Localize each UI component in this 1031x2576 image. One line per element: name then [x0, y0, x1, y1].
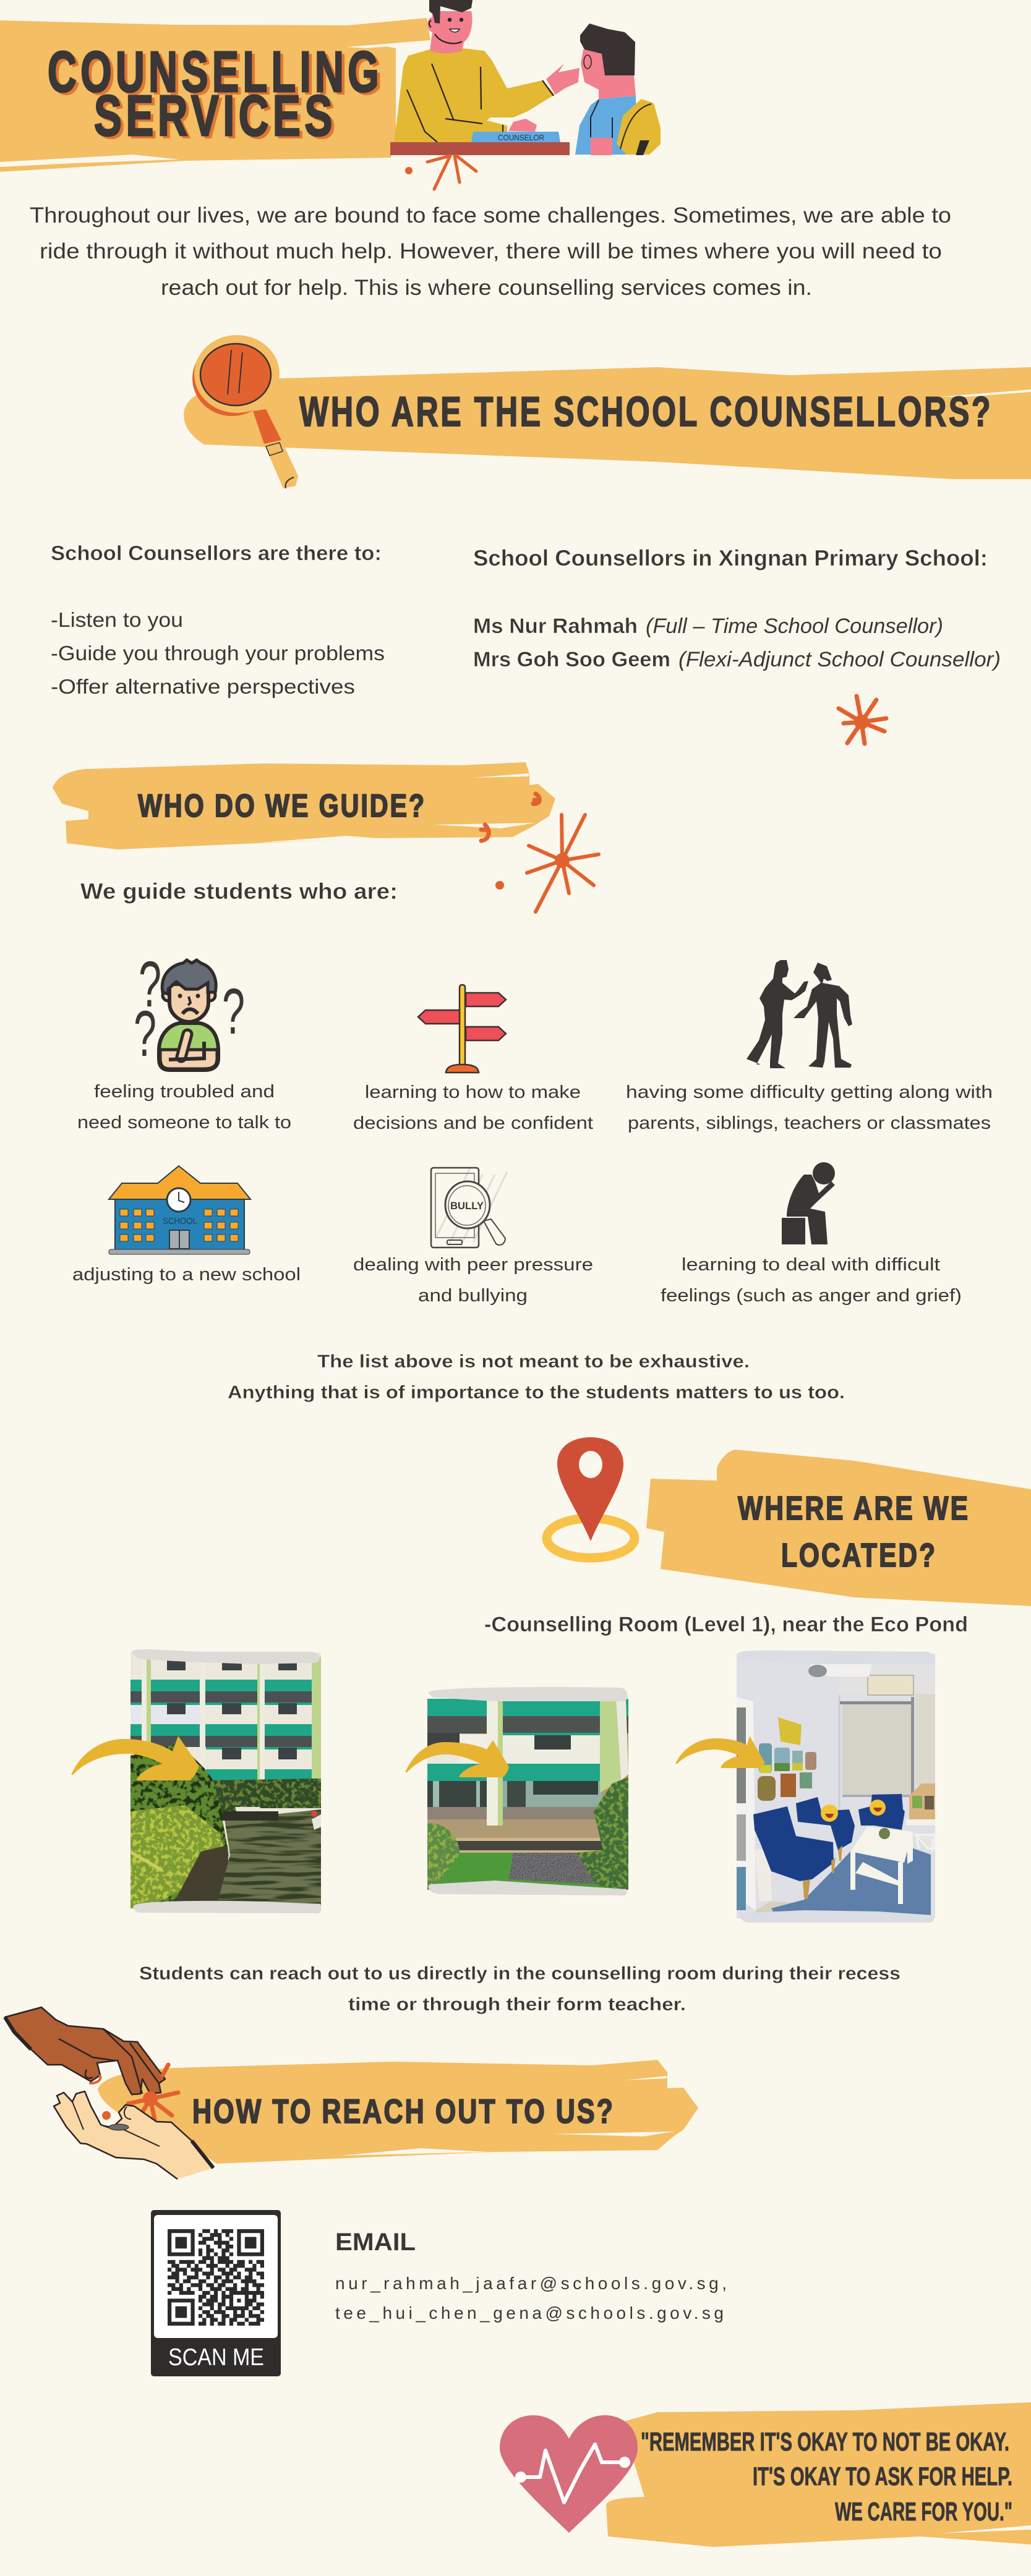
caption: having some difficulty getting along with [626, 1082, 993, 1102]
scan me label: SCAN ME [168, 2344, 264, 2371]
photo: counselling room interior [737, 1651, 935, 1923]
note: list not exhaustive: The list above is not meant to be exhaustive. [317, 1351, 750, 1372]
text block: how to reach out: Students can reach out to us directly in the counselling room during their recess [139, 1963, 901, 1984]
title [48, 40, 386, 150]
icon: puzzled person: ? [139, 948, 161, 1021]
intro paragraph: reach out for help. This is where counselling services comes in. [161, 276, 812, 300]
contact: email: tee_hui_chen_gena@schools.gov.sg [335, 2303, 724, 2323]
intro paragraph: Throughout our lives, we are bound to face some challenges. Sometimes, we are able to [30, 203, 951, 227]
icon: signpost [418, 985, 506, 1073]
text block: counsellors in Xingnan Primary: (Flexi-Adjunct School Counsellor) [678, 648, 1001, 671]
icon: puzzled person [134, 948, 245, 1070]
contact: email: EMAIL [335, 2229, 416, 2256]
icon: orange star [839, 696, 886, 744]
note: list not exhaustive [228, 1351, 845, 1403]
text block: school counsellors role: -Guide you through your problems [51, 642, 385, 665]
closing banner [606, 2402, 1031, 2547]
text block: counsellors in Xingnan Primary: School Counsellors in Xingnan Primary School: [473, 545, 988, 571]
text block: how to reach out: time or through their form teacher. [348, 1994, 686, 2015]
text block: school counsellors role [51, 542, 385, 698]
item: new school [72, 1166, 301, 1285]
title: COUNSELLING [48, 40, 383, 104]
heading: HOW TO REACH OUT TO US? [192, 2092, 615, 2130]
item: feeling troubled [77, 948, 291, 1133]
text block: counsellors in Xingnan Primary: Ms Nur Rahmah [473, 614, 638, 638]
arrow: to room [675, 1736, 765, 1768]
section banner: where are we located [646, 1450, 1031, 1606]
contact: email [335, 2229, 727, 2323]
caption [626, 1082, 993, 1133]
section banner: how to reach out to us [98, 2060, 698, 2164]
title: SERVICES [94, 83, 336, 148]
caption: learning to how to make [365, 1082, 581, 1102]
caption: decisions and be confident [353, 1113, 593, 1133]
coffee table [850, 1827, 913, 1904]
icon: phone with magnifier [431, 1168, 507, 1248]
caption [661, 1255, 962, 1306]
item: making decisions [353, 985, 593, 1133]
caption: and bullying [418, 1286, 528, 1306]
item: getting along with others [626, 960, 993, 1133]
caption [77, 1082, 291, 1133]
icon: school building: SCHOOL [163, 1216, 197, 1226]
wall posters [758, 1717, 816, 1801]
title: SERVICES [97, 86, 340, 150]
counsellor figure [394, 0, 580, 142]
icon: heart with pulse [500, 2415, 638, 2533]
text block: counsellors in Xingnan Primary: Mrs Goh Soo Geem [473, 648, 670, 671]
QR code [168, 2231, 264, 2324]
emoji cushions [821, 1800, 886, 1822]
icon: puzzled person: ? [222, 976, 245, 1048]
photo: counselling room block exterior [427, 1687, 628, 1895]
header banner [0, 18, 430, 172]
icon: orange splat [405, 156, 476, 189]
intro paragraph [30, 203, 951, 300]
heading [738, 1490, 970, 1574]
icon: puzzled person: ? [134, 998, 156, 1070]
icon: phone with magnifier: BULLY [450, 1200, 484, 1212]
text block: school counsellors role: -Offer alternative perspectives [51, 675, 355, 698]
counsellor desk and name sign [390, 132, 570, 155]
text block: how to reach out [139, 1963, 901, 2015]
caption [353, 1255, 593, 1306]
heading: WHO DO WE GUIDE? [138, 788, 426, 824]
caption: parents, siblings, teachers or classmates [628, 1113, 991, 1133]
title: COUNSELLING [51, 42, 386, 106]
caption: dealing with peer pressure [353, 1255, 593, 1275]
section banner: who do we guide [53, 762, 555, 849]
counsellor desk and name sign: COUNSELOR [498, 133, 544, 142]
heading: LOCATED? [781, 1537, 937, 1574]
contact: email: nur_rahmah_jaafar@schools.gov.sg, [335, 2274, 727, 2293]
closing quote [641, 2427, 1012, 2526]
QR code card [151, 2210, 281, 2376]
student figure [575, 23, 661, 155]
icon: orange burst with curls [481, 794, 599, 912]
caption: feelings (such as anger and grief) [661, 1286, 962, 1306]
illustration: counsellor and student [390, 0, 661, 189]
subheading: we guide students: We guide students who are: [80, 878, 398, 904]
caption: learning to deal with difficult [682, 1255, 940, 1275]
section banner: who are the school counsellors [184, 367, 1031, 479]
intro paragraph: ride through it without much help. However, there will be times where you will need to [40, 239, 942, 263]
armchairs [753, 1794, 905, 1881]
icon: magnifying glass [192, 335, 298, 488]
icon: school building [109, 1166, 250, 1254]
heading: WHERE ARE WE [738, 1490, 970, 1527]
text block: school counsellors role: School Counsellors are there to: [51, 542, 382, 564]
item: difficult feelings [661, 1162, 962, 1306]
arrow: to building [71, 1736, 199, 1780]
note: list not exhaustive: Anything that is of importance to the students matters to us too. [228, 1382, 845, 1403]
text block: counsellors in Xingnan Primary: (Full – Time School Counsellor) [646, 614, 943, 638]
icon: two hands with spark [5, 2007, 213, 2179]
spark [90, 2065, 178, 2120]
caption: feeling troubled and [94, 1082, 275, 1102]
icon: location pin [547, 1437, 635, 1558]
text block: school counsellors role: -Listen to you [51, 608, 183, 631]
caption [353, 1082, 593, 1133]
icon: thinking figure [782, 1162, 835, 1244]
item: peer pressure and bullying [353, 1168, 593, 1306]
icon: two people arguing [747, 960, 852, 1068]
caption: adjusting to a new school [72, 1265, 301, 1285]
location text: -Counselling Room (Level 1), near the Eco Pond [484, 1613, 968, 1636]
arrow: to block [405, 1740, 509, 1777]
caption: need someone to talk to [77, 1113, 291, 1133]
photo: building by eco pond [130, 1649, 322, 1913]
text block: counsellors in Xingnan Primary [473, 545, 1001, 671]
